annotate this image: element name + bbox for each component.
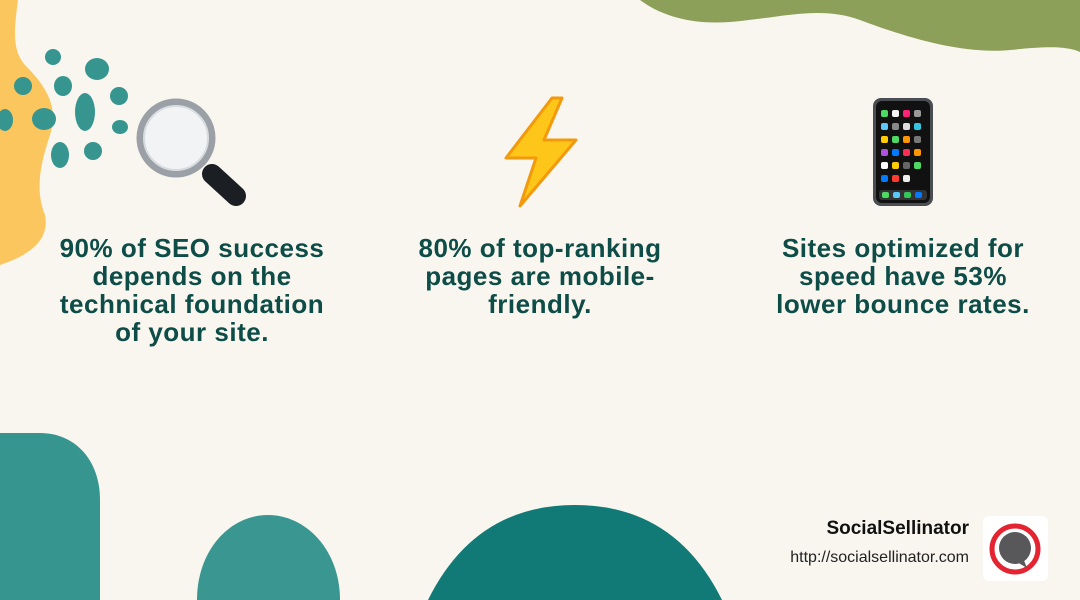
icon: lightning bolt (504, 96, 578, 208)
shape: dark teal dome (428, 505, 722, 600)
text: stat 1 (60, 233, 324, 347)
text: stat 2: 80% of top-ranking (418, 233, 662, 263)
text: stat 3: Sites optimized for (782, 233, 1024, 263)
icon: smartphone (873, 98, 933, 206)
text: stat 3 (776, 233, 1030, 319)
text: stat 2: pages are mobile- (425, 261, 655, 291)
text: stat 1: 90% of SEO success (60, 233, 324, 263)
text: stat 2 (418, 233, 662, 319)
text: stat 1: of your site. (115, 317, 269, 347)
text: stat 3: lower bounce rates. (776, 289, 1030, 319)
shape: teal half circle (197, 515, 340, 600)
brand name: SocialSellinator (826, 518, 969, 539)
text: stat 1: technical foundation (60, 289, 324, 319)
shape: green blob (640, 0, 1080, 52)
text: stat 3: speed have 53% (799, 261, 1007, 291)
text: stat 2: friendly. (488, 289, 592, 319)
logo (983, 516, 1048, 581)
shape: teal dots (0, 49, 128, 168)
brand url: http://socialsellinator.com (790, 549, 969, 566)
text: stat 1: depends on the (92, 261, 292, 291)
shape: teal arch left (0, 433, 100, 600)
shape: yellow blob (0, 0, 53, 265)
icon: magnifying glass (136, 98, 246, 206)
